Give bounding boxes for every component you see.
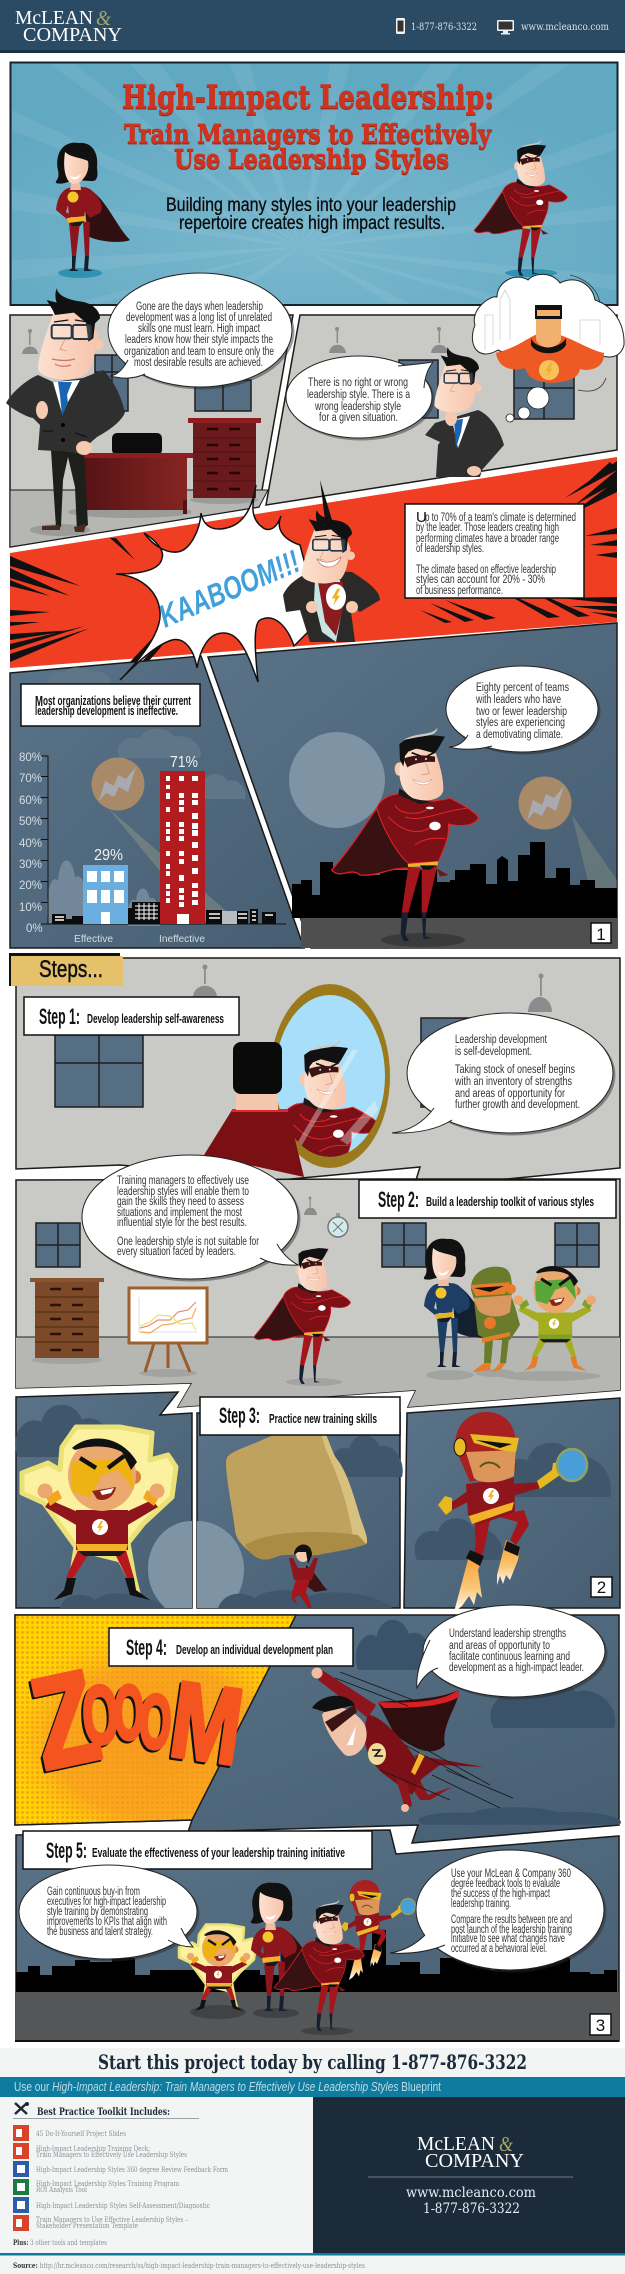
header logo: & — [96, 6, 112, 30]
character: hero — [474, 140, 567, 277]
speech bubble: gain the skills they need to assess — [117, 1196, 244, 1208]
icon: phone — [396, 18, 405, 34]
character: heroine lifting — [289, 1544, 328, 1608]
footer logo: COMPANY — [425, 2150, 524, 2172]
speech bubble: situations and implement the most — [117, 1207, 243, 1219]
clouds — [47, 667, 246, 926]
speech bubble: gone are the days — [108, 273, 292, 387]
character: hero back view — [204, 1042, 304, 1177]
chart: axis: 50% — [19, 816, 42, 828]
subtitle — [166, 195, 456, 234]
speech bubble right: degree feedback tools to evaluate — [451, 1878, 560, 1890]
icon: monitor — [497, 20, 514, 34]
desk and chair — [68, 433, 193, 518]
toolkit items: 45 Do-It-Yourself Project Slides — [36, 2129, 126, 2138]
panel: red kaboom — [10, 457, 617, 668]
callout: most organizations: leadership development is ineffective. — [35, 704, 178, 718]
speech bubble: no right or wrong: There is no right or wrong — [308, 377, 408, 389]
clouds — [218, 1435, 403, 1608]
character: imagined hero — [496, 305, 604, 383]
lamps — [329, 327, 448, 353]
step 2 label: Step 2: — [378, 1187, 419, 1212]
speech bubble left: the business and talent strategy. — [47, 1926, 153, 1938]
callout: most organizations: ost organizations believe their current — [43, 694, 192, 708]
zooom lettering: O — [137, 1679, 174, 1766]
character: heroine — [251, 1883, 325, 2018]
speech bubble: is self-development. — [455, 1046, 532, 1058]
speech bubble: no right or wrong: wrong leadership style — [314, 401, 401, 413]
toolkit items — [13, 2129, 228, 2247]
callout: team climate: The climate based on effective leadership — [416, 564, 556, 576]
callout: team climate: U — [416, 509, 427, 526]
speech bubble: gone are the days: leaders know how their style impacts the — [125, 334, 273, 346]
chart: axis: 70% — [19, 773, 42, 785]
number box: 2 — [597, 1578, 606, 1597]
speech bubble: no right or wrong — [286, 356, 433, 438]
character: heroine — [56, 143, 130, 278]
zooom lettering: M — [164, 1658, 250, 1788]
kaboom text: KAABOOM!!! — [154, 543, 305, 634]
character: powered-up hero — [22, 1427, 176, 1600]
footer contact details: 1-877-876-3322 — [423, 2201, 520, 2217]
blueprint bar: Use our High-Impact Leadership: Train Managers to Effectively Use Leadership Styles Blueprint — [14, 2080, 441, 2094]
speech bubble left: Gain continuous buy-in from — [47, 1886, 140, 1898]
ground — [16, 1992, 619, 2041]
speech bubble right: Use your McLean & Company 360 — [451, 1868, 571, 1880]
hero shadow — [381, 933, 465, 947]
character: powered-up hero — [179, 1924, 256, 2019]
signal beam — [108, 808, 232, 922]
source bar: Source: http://hr.mcleanco.com/research/ss/high-impact-leadership-train-managers-to-effectively-use-leadership-styles — [13, 2261, 365, 2270]
callout: most organizations: M — [35, 693, 43, 710]
mirror — [274, 984, 390, 1168]
chart: x labels: Effective — [74, 933, 113, 945]
speech bubble — [82, 1155, 298, 1279]
speech bubble: Taking stock of oneself begins — [455, 1064, 575, 1076]
icon: stopwatch — [328, 1213, 348, 1237]
panel: hero in city — [208, 623, 617, 948]
callout: most organizations — [21, 684, 200, 726]
step 4 label — [109, 1628, 353, 1666]
call to action — [0, 2048, 625, 2077]
step 5 label — [23, 1831, 372, 1869]
step 1 label: Step 1: — [39, 1004, 80, 1029]
speech bubble: gone are the days: development was a long list of unrelated — [126, 312, 272, 324]
chart: effective bar — [83, 847, 128, 924]
source bar — [0, 2253, 625, 2274]
icon: bat signal — [518, 776, 572, 830]
toolkit items: Stakeholder Presentation Template — [36, 2221, 138, 2230]
panel: ineffective chart — [10, 656, 304, 948]
speech bubble: gone are the days: skills one must learn. High impact — [138, 323, 261, 335]
speech bubble: and areas of opportunity for — [455, 1088, 565, 1100]
panel: step 3 right — [404, 1398, 620, 1612]
callout: team climate: of business performance. — [416, 585, 503, 597]
clouds — [15, 1405, 168, 1608]
panel bottom border — [15, 2040, 619, 2042]
callout: team climate: performing climates have a broader range — [416, 533, 559, 545]
character: super-shirt manager — [283, 510, 380, 642]
header website: www.mcleanco.com — [521, 22, 609, 33]
step 3 label — [200, 1397, 400, 1435]
moon — [148, 1521, 192, 1608]
icon: bat signal — [92, 758, 144, 810]
header bar — [0, 0, 625, 53]
step 5 label: Evaluate the effectiveness of your leadership training initiative — [92, 1846, 345, 1860]
panel: step 5 — [15, 1830, 619, 2042]
toolkit items: High-Impact Leadership Styles Self-Assessment/Diagnostic — [36, 2201, 210, 2210]
zooom lettering: O — [114, 1671, 144, 1756]
halftone — [15, 1615, 296, 1825]
chart: axis: 10% — [19, 902, 42, 914]
easel chart — [129, 1288, 207, 1377]
step 1 label — [24, 997, 239, 1035]
lamp — [304, 1196, 317, 1215]
panel: step 3 middle — [197, 1397, 403, 1608]
footer contact details: www.mcleanco.com — [406, 2185, 536, 2201]
chart: axis: 20% — [19, 880, 42, 892]
speech bubble — [446, 666, 598, 752]
toolkit items: Train Managers to Effectively Use Leadership Styles — [36, 2150, 187, 2159]
speech bubble: two or fewer leadership — [476, 706, 567, 718]
callout: team climate: by the leader. Those leaders creating high — [416, 522, 559, 534]
burst: kaboom — [116, 485, 320, 682]
file icons — [13, 2125, 29, 2231]
windows — [36, 1223, 599, 1267]
character: blue heroine — [424, 1239, 498, 1380]
callout: team climate: of leadership styles. — [416, 543, 484, 555]
speech bubble: gone are the days: organization and team to ensure only the — [124, 346, 274, 358]
speech bubble: leadership styles will enable them to — [117, 1186, 249, 1198]
speech bubble: gone are the days: most desirable results are achieved. — [134, 357, 263, 369]
speech bubble: facilitate continuous learning and — [449, 1651, 570, 1663]
title: High-Impact Leadership: — [122, 78, 494, 116]
windows — [399, 360, 574, 419]
step 3 label: Step 3: — [219, 1403, 260, 1428]
panel: thinking manager — [266, 315, 617, 505]
zooom lettering — [19, 1642, 250, 1797]
step 3 label: Practice new training skills — [269, 1412, 377, 1426]
footer logo: & — [499, 2132, 514, 2156]
callout: team climate: styles can account for 20% - 30% — [416, 574, 545, 586]
chart: effective bar: 29% — [94, 847, 123, 864]
chart: axis: 30% — [19, 859, 42, 871]
panel: step 2 — [16, 1155, 620, 1407]
signal beam — [572, 815, 617, 895]
speech bubble: no right or wrong: leadership style. There is a — [307, 389, 410, 401]
panel: footer contact — [313, 2097, 625, 2253]
toolkit items: Plus: 3 other tools and templates — [13, 2238, 107, 2247]
speech bubble: with leaders who have — [475, 694, 561, 706]
speech bubble: influential style for the best results. — [117, 1217, 247, 1229]
chart: x labels — [74, 933, 205, 945]
subtitle: repertoire creates high impact results. — [179, 213, 445, 234]
speech bubble right: the success of the high-impact — [451, 1888, 551, 1900]
clouds — [356, 1620, 621, 1825]
character: flying helmet hero — [438, 1412, 587, 1612]
speech bubble right: leadership training. — [451, 1898, 511, 1910]
chart: x labels: Ineffective — [159, 933, 205, 945]
speech bubble: Training managers to effectively use — [117, 1175, 249, 1187]
character: hero — [274, 1900, 364, 2035]
character: flying hero — [312, 1668, 513, 1812]
toolkit items: High-Impact Leadership Styles Training Program — [36, 2179, 179, 2188]
speech bubble: every situation faced by leaders. — [117, 1246, 236, 1258]
character: hero — [254, 1243, 350, 1386]
speech bubble left: improvements to KPIs that align with — [47, 1916, 167, 1928]
speech bubble: further growth and development. — [455, 1099, 580, 1111]
thought bubble — [472, 274, 624, 422]
speech bubble left — [19, 1865, 197, 1959]
lamps — [193, 964, 552, 1012]
speech bubble: One leadership style is not suitable for — [117, 1236, 259, 1248]
number box — [590, 2014, 611, 2035]
chart: axis: 60% — [19, 795, 42, 807]
moon — [289, 732, 385, 828]
panel: step 1 — [15, 957, 621, 1179]
chart: axis: 40% — [19, 838, 42, 850]
speech bubble: a demotivating climate. — [476, 729, 563, 741]
mini skyline — [52, 902, 276, 924]
cabinet — [188, 418, 261, 504]
speech bubble: no right or wrong: for a given situation. — [319, 412, 398, 424]
speech bubble right: occurred at a behavioral level. — [451, 1943, 547, 1955]
speech bubble left: style training by demonstrating — [47, 1906, 148, 1918]
character: hero — [332, 727, 478, 942]
footer logo: McLEAN — [417, 2133, 495, 2155]
speech bubble left: executives for high-impact leadership — [47, 1896, 166, 1908]
skyline — [292, 842, 617, 918]
skyline — [16, 1930, 617, 1992]
speech bubble: gone are the days: Gone are the days when leadership — [136, 301, 263, 313]
step 4 label: Develop an individual development plan — [176, 1643, 333, 1657]
panel: step 4 — [15, 1605, 621, 1843]
toolkit items: High-Impact Leadership Training Deck: — [36, 2144, 150, 2153]
step 5 label: Step 5: — [46, 1838, 87, 1863]
number box: 1 — [596, 925, 606, 944]
speech bubble right — [390, 1850, 604, 1970]
speech bubble: Understand leadership strengths — [449, 1628, 566, 1640]
title: Train Managers to Effectively — [124, 120, 492, 150]
title: Use Leadership Styles — [174, 145, 449, 175]
ground — [301, 918, 617, 948]
step 2 label — [359, 1180, 616, 1218]
panel: toolkit list — [0, 2097, 313, 2253]
header logo — [15, 6, 122, 46]
lamp — [22, 329, 38, 354]
speech bubble right: initiative to see what changes have — [451, 1933, 565, 1945]
subtitle: Building many styles into your leadership — [166, 195, 456, 216]
character: helmet hero — [470, 1267, 520, 1377]
header logo: McLEAN — [15, 7, 93, 29]
character: green hero — [500, 1259, 603, 1381]
step 4 label: Step 4: — [126, 1635, 167, 1660]
callout: team climate — [405, 504, 584, 598]
cabinet — [30, 1278, 104, 1364]
panel: step 3 left — [15, 1392, 192, 1608]
character: manager thinking — [425, 347, 504, 477]
chart: axis — [19, 752, 286, 935]
title — [122, 78, 494, 175]
speech bubble — [392, 1013, 613, 1133]
speech bubble: and areas of opportunity to — [449, 1640, 550, 1652]
chart: ineffective bar — [160, 754, 205, 924]
steps tab: Steps... — [39, 956, 103, 983]
icon: tools — [15, 2102, 29, 2114]
speech bubble — [417, 1605, 605, 1697]
speech bubble: Leadership development — [455, 1034, 548, 1046]
toolkit items: High-Impact Leadership Styles 360 degree Review Feedback Form — [36, 2165, 228, 2174]
toolkit items: Train Managers to Use Effective Leadership Styles – — [36, 2215, 188, 2224]
panel: title hero — [10, 62, 618, 305]
steps tab — [9, 953, 123, 986]
footer contact details — [406, 2185, 536, 2217]
character: flying helmet hero — [341, 1880, 416, 1980]
character: manager standing — [6, 288, 125, 536]
speech bubble: styles are experiencing — [476, 717, 565, 729]
panel: office manager — [10, 315, 293, 547]
number box — [591, 1577, 612, 1597]
windows — [55, 1018, 481, 1107]
header logo: COMPANY — [23, 24, 122, 46]
speech bubble: Eighty percent of teams — [476, 682, 569, 694]
step 1 label: Develop leadership self-awareness — [87, 1012, 224, 1026]
header phone number: 1-877-876-3322 — [411, 22, 477, 33]
toolkit items: ROI Analysis Tool — [36, 2185, 87, 2194]
speech bubble: with an inventory of strengths — [454, 1076, 572, 1088]
blueprint bar — [0, 2077, 625, 2097]
clouds — [415, 1443, 611, 1560]
chart: axis: 80% — [19, 752, 42, 764]
number box — [591, 923, 611, 944]
footer logo — [417, 2132, 524, 2172]
zooom lettering: Z — [19, 1642, 110, 1797]
toolkit heading: Best Practice Toolkit Includes: — [37, 2107, 170, 2118]
rock — [226, 1424, 367, 1559]
number box: 3 — [596, 2016, 605, 2035]
windows — [95, 355, 251, 411]
moon — [197, 1521, 244, 1608]
zooom lettering: O — [80, 1669, 121, 1762]
chart: axis: 0% — [26, 923, 43, 935]
chart: ineffective bar: 71% — [170, 754, 198, 771]
